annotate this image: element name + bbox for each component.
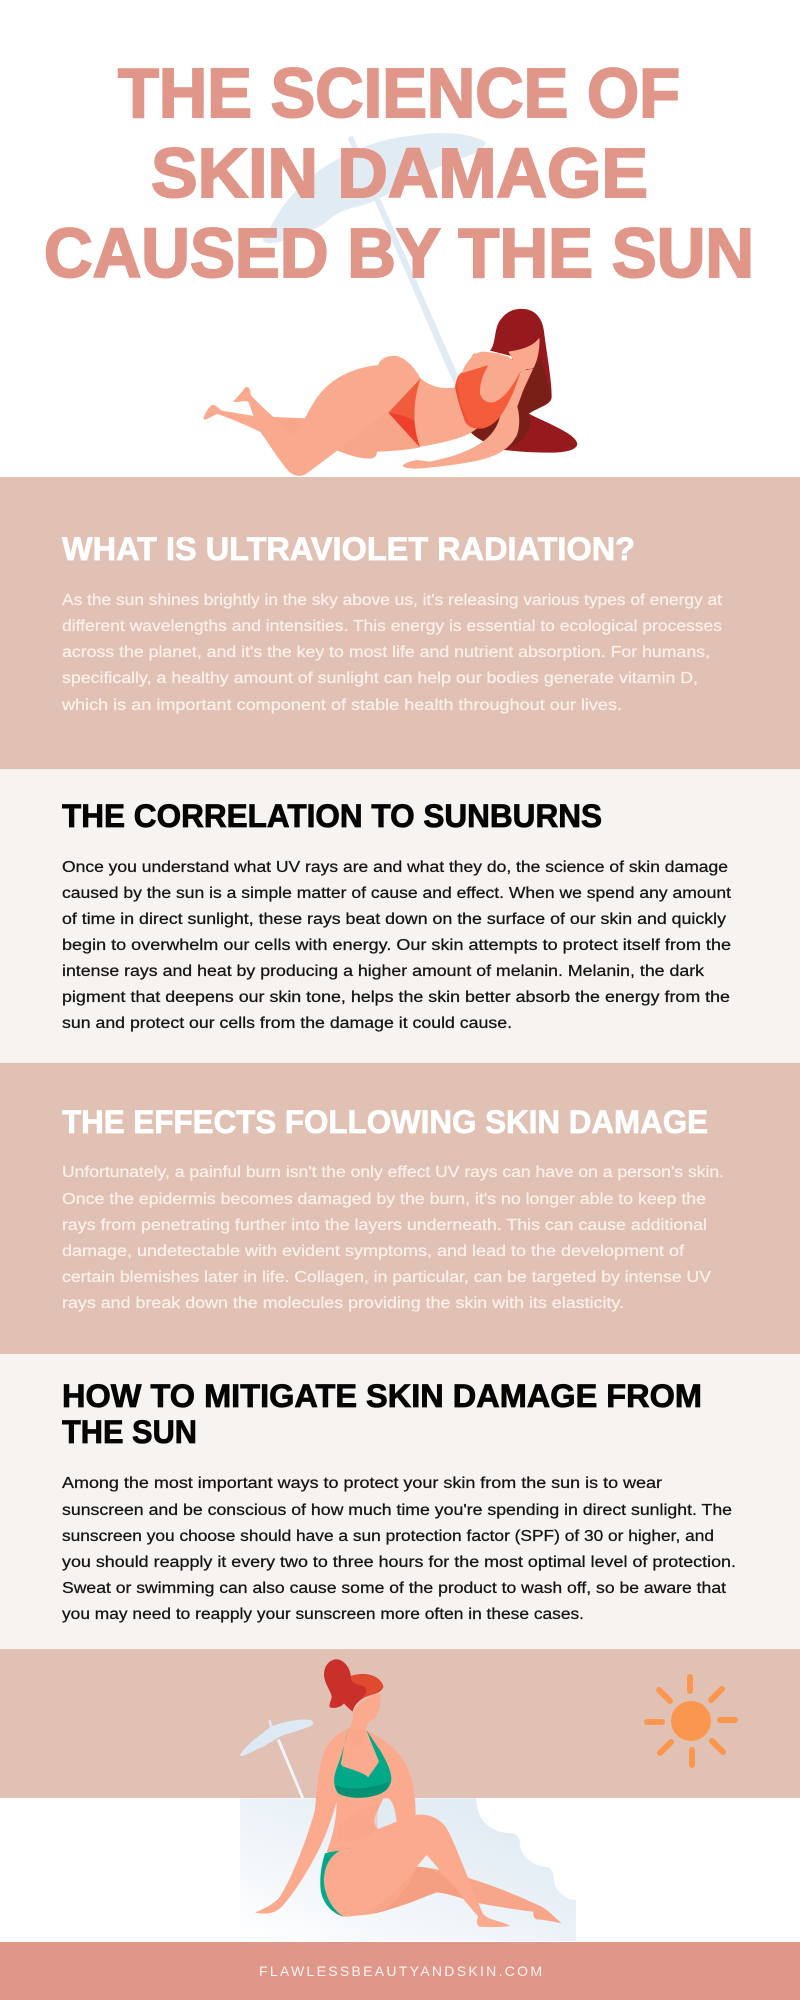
body text xyxy=(62,859,732,1032)
body text: which is an important component of stable health throughout our lives. xyxy=(61,697,622,714)
bikini bottom xyxy=(388,378,421,447)
heading xyxy=(62,1378,702,1450)
panel background xyxy=(0,1354,800,1649)
back leg xyxy=(343,1867,562,1923)
body text: you may need to reapply your sunscreen more often in these cases. xyxy=(62,1606,584,1623)
chest and shoulder xyxy=(462,352,527,402)
bikini top shadow xyxy=(335,1782,390,1798)
body text: different wavelengths and intensities. This energy is essential to ecological processes xyxy=(62,618,722,635)
body text: sun and protect our cells from the damage it could cause. xyxy=(62,1015,512,1032)
heading: HOW TO MITIGATE SKIN DAMAGE FROM xyxy=(62,1378,702,1414)
illustration: woman sitting on the beach in a green bikini xyxy=(240,1659,576,1941)
hair xyxy=(470,309,577,453)
body text: Among the most important ways to protect your skin from the sun is to wear xyxy=(62,1475,662,1492)
body text: sunscreen and be conscious of how much time you're spending in direct sunlight. The xyxy=(62,1502,732,1519)
body text: Sweat or swimming can also cause some of the product to wash off, so be aware that xyxy=(62,1580,727,1597)
bikini top shadow xyxy=(455,383,485,428)
heading: WHAT IS ULTRAVIOLET RADIATION? xyxy=(62,531,635,567)
footer background xyxy=(0,1942,800,2000)
body text: Once you understand what UV rays are and what they do, the science of skin damage xyxy=(62,859,728,876)
panel: footer xyxy=(0,1942,800,2000)
body text: Once the epidermis becomes damaged by the burn, it's no longer able to keep the xyxy=(62,1191,706,1208)
heading: THE CORRELATION TO SUNBURNS xyxy=(62,798,602,834)
title: SKIN DAMAGE xyxy=(151,134,648,212)
body text: across the planet, and it's the key to most life and nutrient absorption. For humans, xyxy=(62,644,710,661)
body shading xyxy=(275,413,420,459)
title xyxy=(44,54,754,292)
panel background xyxy=(0,477,800,769)
body text: certain blemishes later in life. Collagen, in particular, can be targeted by intense UV xyxy=(62,1269,712,1286)
body xyxy=(255,1693,510,1927)
body shading xyxy=(337,1728,380,1842)
website url: FLAWLESSBEAUTYANDSKIN.COM xyxy=(259,1963,542,1979)
body text: pigment that deepens our skin tone, helps the skin better absorb the energy from the xyxy=(62,989,730,1006)
hair shadow xyxy=(470,357,551,449)
body text xyxy=(62,1164,724,1312)
hair xyxy=(324,1659,383,1712)
bikini bottom xyxy=(320,1851,343,1916)
umbrella canopy xyxy=(240,1720,313,1756)
heading: THE EFFECTS FOLLOWING SKIN DAMAGE xyxy=(62,1104,708,1140)
body text: caused by the sun is a simple matter of cause and effect. When we spend any amount xyxy=(62,885,732,902)
bikini bottom shadow xyxy=(388,413,420,447)
body text: sunscreen you choose should have a sun protection factor (SPF) of 30 or higher, and xyxy=(62,1528,714,1545)
panel: the correlation to sunburns xyxy=(0,769,800,1063)
icon: sun xyxy=(647,1677,735,1765)
sand xyxy=(240,1798,576,1941)
illustration: beach umbrella behind title xyxy=(263,133,486,384)
bikini top xyxy=(455,365,521,429)
panel background xyxy=(0,1063,800,1354)
illustration: woman lying on her side in a red bikini xyxy=(203,309,577,476)
panel: what is ultraviolet radiation xyxy=(0,477,800,769)
arm xyxy=(403,368,533,469)
body text: rays and break down the molecules providing the skin with its elasticity. xyxy=(62,1295,624,1312)
hair highlight xyxy=(351,1674,383,1698)
body text: damage, undetectable with evident symptoms, and lead to the development of xyxy=(62,1243,685,1260)
panel: illustration band background xyxy=(0,1649,800,1798)
back leg xyxy=(203,405,305,436)
heading: THE SUN xyxy=(62,1414,197,1450)
body text xyxy=(61,592,723,714)
body text: begin to overwhelm our cells with energy. Our skin attempts to protect itself from the xyxy=(62,937,731,954)
panel: how to mitigate skin damage from the sun xyxy=(0,1354,800,1649)
body and front leg xyxy=(233,353,513,476)
body text: you should reapply it every two to three hours for the most optimal level of protection. xyxy=(62,1554,736,1571)
bikini top xyxy=(334,1728,391,1798)
body text: intense rays and heat by producing a higher amount of melanin. Melanin, the dark xyxy=(62,963,704,980)
body text: Unfortunately, a painful burn isn't the only effect UV rays can have on a person's skin. xyxy=(62,1164,724,1181)
panel background xyxy=(0,769,800,1063)
panel: the effects following skin damage xyxy=(0,1063,800,1354)
body text: rays from penetrating further into the layers underneath. This can cause additional xyxy=(62,1217,707,1234)
gap between arm and torso xyxy=(374,1798,397,1829)
body text: of time in direct sunlight, these rays beat down on the surface of our skin and quickly xyxy=(62,911,726,928)
body text: As the sun shines brightly in the sky above us, it's releasing various types of energy at xyxy=(62,592,723,609)
thigh shadow xyxy=(357,1867,463,1916)
body text xyxy=(62,1475,736,1623)
title: THE SCIENCE OF xyxy=(118,54,680,132)
umbrella pole xyxy=(277,1739,304,1798)
body text: specifically, a healthy amount of sunlight can help our bodies generate vitamin D, xyxy=(62,670,698,687)
face xyxy=(508,338,539,369)
title: CAUSED BY THE SUN xyxy=(44,214,754,292)
